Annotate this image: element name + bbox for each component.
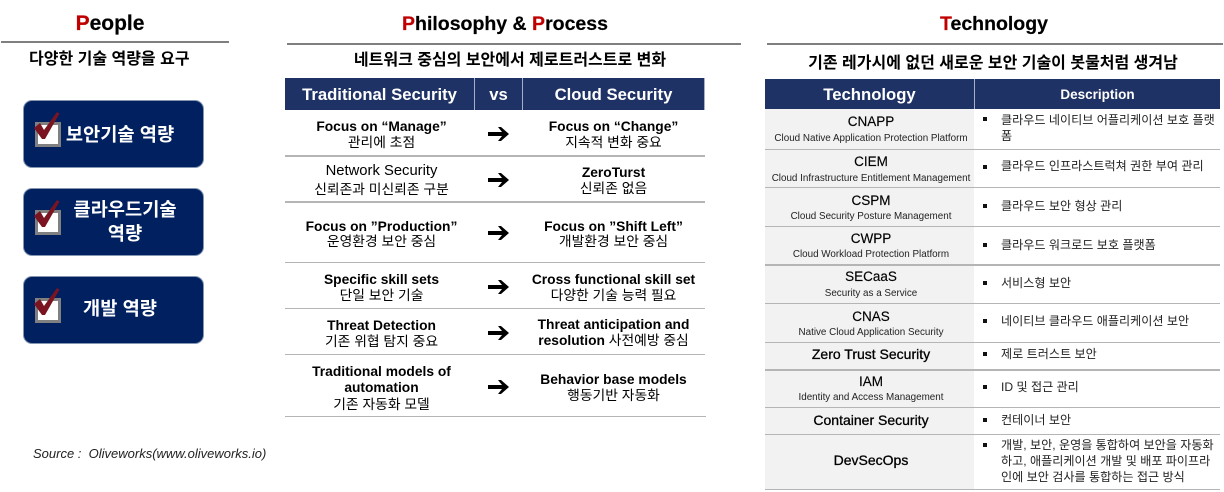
- label: 보안기술 역량: [66, 124, 174, 145]
- Container description: 컨테이너 보안: [1001, 413, 1071, 427]
- row 4 right: Cross functional skill set: [532, 272, 695, 287]
- row 6 right: Behavior base models: [540, 372, 687, 387]
- DevSecOps description: 인에 보안 검사를 통합하는 접근 방식: [1001, 470, 1185, 484]
- DevSecOps description: 개발, 보안, 운영을 통합하여 보안을 자동화: [1001, 438, 1214, 452]
- header: Technology: [765, 79, 975, 109]
- row 1 right: 지속적 변화 중요: [565, 135, 662, 150]
- row 1 right: [549, 119, 678, 150]
- panel: cloud skill button: [23, 188, 204, 256]
- CNAPP description: 폼: [1001, 129, 1012, 143]
- header: Traditional Security: [285, 78, 475, 110]
- arrow: [488, 226, 509, 240]
- header: Traditional Security: Traditional Security: [302, 84, 457, 104]
- panel: development skill button: [23, 276, 204, 344]
- IAM description: ID 및 접근 관리: [1001, 380, 1079, 394]
- row 5 right: resolution 사전예방 중심: [538, 333, 689, 348]
- row 5 left: [325, 318, 438, 349]
- header: Cloud Security: Cloud Security: [555, 84, 672, 104]
- text: source: Source : Oliveworks(www.oliveworks.io): [33, 446, 266, 461]
- row 3 right: 개발환경 보안 중심: [559, 234, 668, 249]
- CNAS full name: Native Cloud Application Security: [798, 327, 944, 338]
- IAM name: IAM: [859, 374, 883, 389]
- row 6 right: 행동기반 자동화: [567, 388, 660, 403]
- row 5 left: Threat Detection: [327, 318, 436, 333]
- arrow: [488, 280, 509, 294]
- header: Description: [975, 79, 1220, 109]
- arrow: [488, 173, 509, 187]
- DevSecOps name: DevSecOps: [834, 452, 908, 468]
- Container Security name: Container Security: [813, 412, 929, 428]
- label: [73, 199, 177, 244]
- icon: checkbox: [35, 122, 61, 147]
- row 1 left: Focus on “Manage”: [316, 119, 447, 134]
- row 5 left: 기존 위협 탐지 중요: [325, 334, 438, 349]
- Zero Trust description: 제로 트러스트 보안: [1001, 347, 1097, 361]
- SECaaS bullet: [983, 281, 987, 285]
- row 4 left: Specific skill sets: [324, 272, 439, 287]
- row 6 left: 기존 자동화 모델: [333, 397, 430, 412]
- heading: Philosophy & Process: Philosophy & Process: [402, 13, 608, 35]
- CIEM full name: Cloud Infrastructure Entitlement Management: [772, 173, 970, 184]
- CNAPP description: 클라우드 네이티브 어플리케이션 보호 플랫: [1001, 113, 1215, 127]
- header: vs: vs: [489, 84, 508, 104]
- SECaaS description: 서비스형 보안: [1001, 276, 1071, 290]
- row 4 left: 단일 보안 기술: [340, 288, 423, 303]
- row 5 right: [538, 317, 689, 348]
- header: Technology: Technology: [823, 84, 916, 104]
- header: Cloud Security: [523, 78, 705, 110]
- header: vs: [475, 78, 523, 110]
- icon: checkbox: [35, 210, 61, 235]
- panel: security skill button: [23, 100, 204, 168]
- text: people subtitle: 다양한 기술 역량을 요구: [29, 51, 190, 68]
- Zero Trust bullet: [983, 352, 987, 356]
- Zero Trust Security name: Zero Trust Security: [812, 346, 930, 362]
- CNAPP description: [1001, 113, 1215, 143]
- CNAS bullet: [983, 319, 987, 323]
- row 3 left: [306, 219, 457, 249]
- CIEM bullet: [983, 165, 987, 169]
- CSPM description: 클라우드 보안 형상 관리: [1001, 199, 1122, 213]
- DevSecOps description: 하고, 애플리케이션 개발 및 배포 파이프라: [1001, 454, 1210, 468]
- CIEM description: 클라우드 인프라스트럭쳐 권한 부여 관리: [1001, 159, 1204, 173]
- row 3 right: [544, 219, 683, 249]
- arrow: [488, 127, 509, 141]
- CSPM bullet: [983, 204, 987, 208]
- CWPP description: 클라우드 워크로드 보호 플랫폼: [1001, 238, 1156, 252]
- text: philosophy subtitle: 네트워크 중심의 보안에서 제로트러스트로 변화: [354, 52, 666, 69]
- SECaaS full name: Security as a Service: [825, 288, 917, 299]
- CNAPP full name: Cloud Native Application Protection Platform: [774, 133, 968, 144]
- table header: technology list: [765, 79, 1220, 109]
- row 3 right: Focus on ”Shift Left”: [544, 219, 683, 234]
- CSPM name: CSPM: [851, 193, 890, 208]
- CNAS description: 네이티브 클라우드 애플리케이션 보안: [1001, 314, 1189, 328]
- CWPP bullet: [983, 243, 987, 247]
- CWPP full name: Cloud Workload Protection Platform: [793, 249, 949, 260]
- label: 역량: [108, 223, 142, 244]
- CNAS name: CNAS: [852, 309, 890, 324]
- SECaaS name: SECaaS: [845, 269, 897, 284]
- row 3 left: 운영환경 보안 중심: [327, 234, 436, 249]
- row 6 left: automation: [344, 380, 419, 395]
- row 2 left: 신뢰존과 미신뢰존 구분: [314, 182, 449, 196]
- header: Description: Description: [1060, 87, 1135, 102]
- row 2 right: [580, 165, 647, 196]
- DevSecOps description: [1001, 438, 1214, 484]
- row 5 right: Threat anticipation and: [538, 317, 689, 332]
- row 6 left: Traditional models of: [312, 364, 451, 379]
- row 2 right: 신뢰존 없음: [580, 181, 647, 196]
- label: 클라우드기술: [73, 199, 177, 220]
- row 4 left: [324, 272, 439, 303]
- CWPP name: CWPP: [851, 231, 891, 246]
- CSPM full name: Cloud Security Posture Management: [791, 211, 951, 222]
- row 2 left: Network Security: [326, 163, 437, 179]
- Container bullet: [983, 418, 987, 422]
- CIEM name: CIEM: [854, 154, 888, 169]
- row 4 right: [532, 272, 695, 303]
- row 6 left: [312, 364, 451, 412]
- arrow: [488, 380, 509, 394]
- row 1 left: [316, 119, 447, 150]
- heading: Technology: Technology: [940, 13, 1048, 35]
- row 2 right: ZeroTurst: [582, 165, 645, 180]
- DevSecOps bullet: [983, 443, 987, 447]
- heading: People: People: [76, 12, 144, 35]
- label: 개발 역량: [83, 298, 157, 319]
- row 4 right: 다양한 기술 능력 필요: [551, 288, 676, 303]
- row 1 right: Focus on “Change”: [549, 119, 678, 134]
- row 3 left: Focus on ”Production”: [306, 219, 457, 234]
- IAM bullet: [983, 385, 987, 389]
- arrow: [488, 326, 509, 340]
- text: technology subtitle: 기존 레가시에 없던 새로운 보안 기술이 봇물처럼 생겨남: [808, 55, 1178, 72]
- row 6 right: [540, 372, 687, 403]
- CNAPP bullet: [983, 117, 987, 121]
- row 1 left: 관리에 초점: [348, 135, 415, 150]
- icon: checkbox: [35, 298, 61, 323]
- CNAPP name: CNAPP: [848, 114, 894, 129]
- row 2 left: [314, 163, 449, 196]
- table header: traditional vs cloud security: [285, 78, 705, 110]
- IAM full name: Identity and Access Management: [798, 392, 944, 403]
